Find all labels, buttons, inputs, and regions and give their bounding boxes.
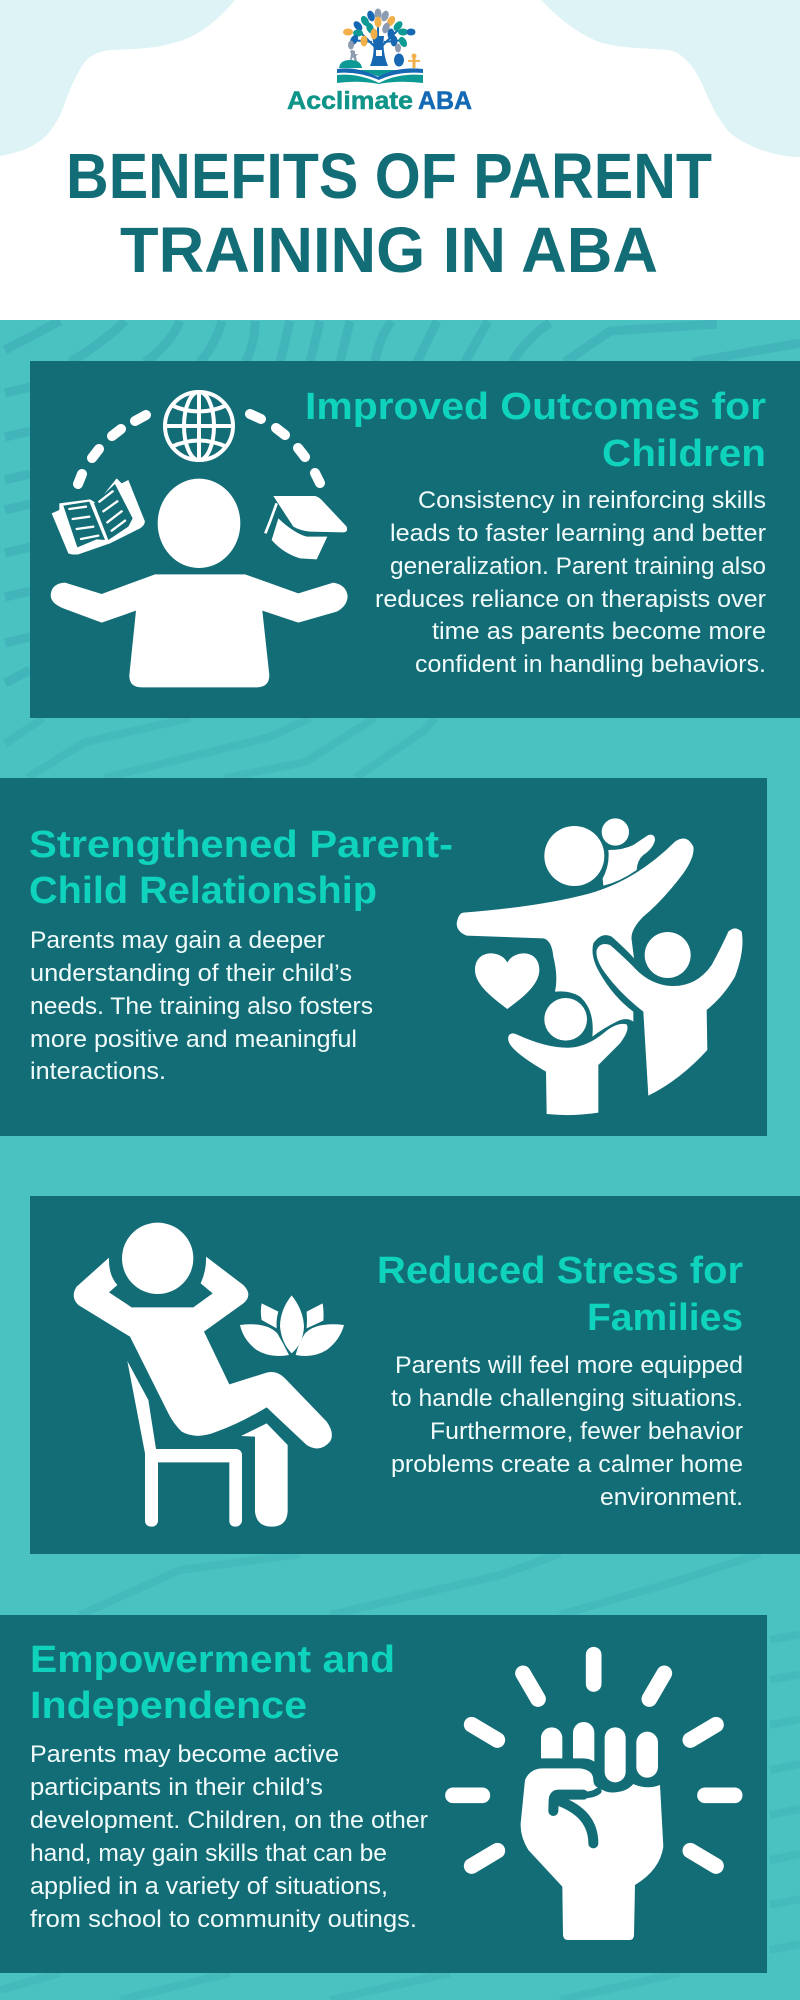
heading bbox=[29, 824, 453, 912]
logo wordmark: ABA bbox=[418, 87, 472, 115]
body text: problems create a calmer home bbox=[391, 1451, 743, 1478]
body text: Consistency in reinforcing skills bbox=[418, 487, 766, 514]
body text: Parents may become active bbox=[30, 1741, 339, 1768]
decorative blob: top right bbox=[541, 0, 800, 157]
body text bbox=[30, 927, 373, 1085]
panel: improved outcomes bbox=[30, 361, 800, 718]
header: white title area bbox=[0, 0, 800, 320]
body text: understanding of their child’s bbox=[30, 960, 352, 987]
icon: person bbox=[51, 479, 348, 687]
heading bbox=[30, 1639, 395, 1727]
body text: to handle challenging situations. bbox=[391, 1385, 743, 1412]
body text: participants in their child’s bbox=[30, 1774, 323, 1801]
body text: more positive and meaningful bbox=[30, 1026, 357, 1053]
body text: from school to community outings. bbox=[30, 1906, 417, 1933]
body text: time as parents become more bbox=[432, 618, 766, 645]
body text: Furthermore, fewer behavior bbox=[430, 1418, 743, 1445]
heading bbox=[305, 386, 766, 475]
heading: Improved Outcomes for bbox=[305, 386, 766, 428]
heading bbox=[377, 1250, 743, 1339]
heading: Strengthened Parent- bbox=[29, 824, 453, 866]
logo wordmark: Acclimate bbox=[287, 87, 413, 115]
title bbox=[66, 140, 712, 286]
body text bbox=[375, 487, 766, 678]
body text: applied in a variety of situations, bbox=[30, 1873, 388, 1900]
body text: leads to faster learning and better bbox=[390, 520, 766, 547]
panel: strengthened relationship bbox=[0, 778, 767, 1136]
icon: dashed arc bbox=[78, 414, 320, 484]
logo tree mark bbox=[337, 8, 423, 84]
icon: family with heart bbox=[457, 818, 742, 1115]
body text: Parents will feel more equipped bbox=[395, 1352, 743, 1379]
heading: Families bbox=[587, 1297, 743, 1339]
heading: Child Relationship bbox=[29, 870, 377, 912]
title: BENEFITS OF PARENT bbox=[66, 140, 712, 212]
body text: needs. The training also fosters bbox=[30, 993, 373, 1020]
body text: development. Children, on the other bbox=[30, 1807, 428, 1834]
body text: reduces reliance on therapists over bbox=[375, 586, 766, 613]
title: TRAINING IN ABA bbox=[120, 214, 658, 286]
body text: Parents may gain a deeper bbox=[30, 927, 325, 954]
heading: Independence bbox=[30, 1685, 307, 1727]
icon: raised fist with rays bbox=[453, 1655, 735, 1940]
icon: person juggling globe, book and cap bbox=[51, 392, 348, 687]
heading: Reduced Stress for bbox=[377, 1250, 743, 1292]
icon: globe bbox=[165, 392, 233, 460]
body text bbox=[30, 1741, 428, 1933]
icon: open book bbox=[52, 478, 145, 555]
body text: interactions. bbox=[30, 1058, 166, 1085]
icon: relaxed person on chair with lotus bbox=[74, 1223, 344, 1527]
decorative blob: top left bbox=[0, 0, 235, 156]
body text: generalization. Parent training also bbox=[390, 553, 766, 580]
body text: confident in handling behaviors. bbox=[415, 651, 766, 678]
panel: reduced stress bbox=[30, 1196, 800, 1554]
icon: graduation cap bbox=[265, 496, 347, 559]
body text bbox=[391, 1352, 743, 1511]
body text: hand, may gain skills that can be bbox=[30, 1840, 387, 1867]
logo: Acclimate ABA bbox=[287, 8, 472, 115]
heading: Empowerment and bbox=[30, 1639, 395, 1681]
heading: Children bbox=[602, 433, 766, 475]
panel: empowerment bbox=[0, 1615, 767, 1973]
body text: environment. bbox=[600, 1484, 743, 1511]
